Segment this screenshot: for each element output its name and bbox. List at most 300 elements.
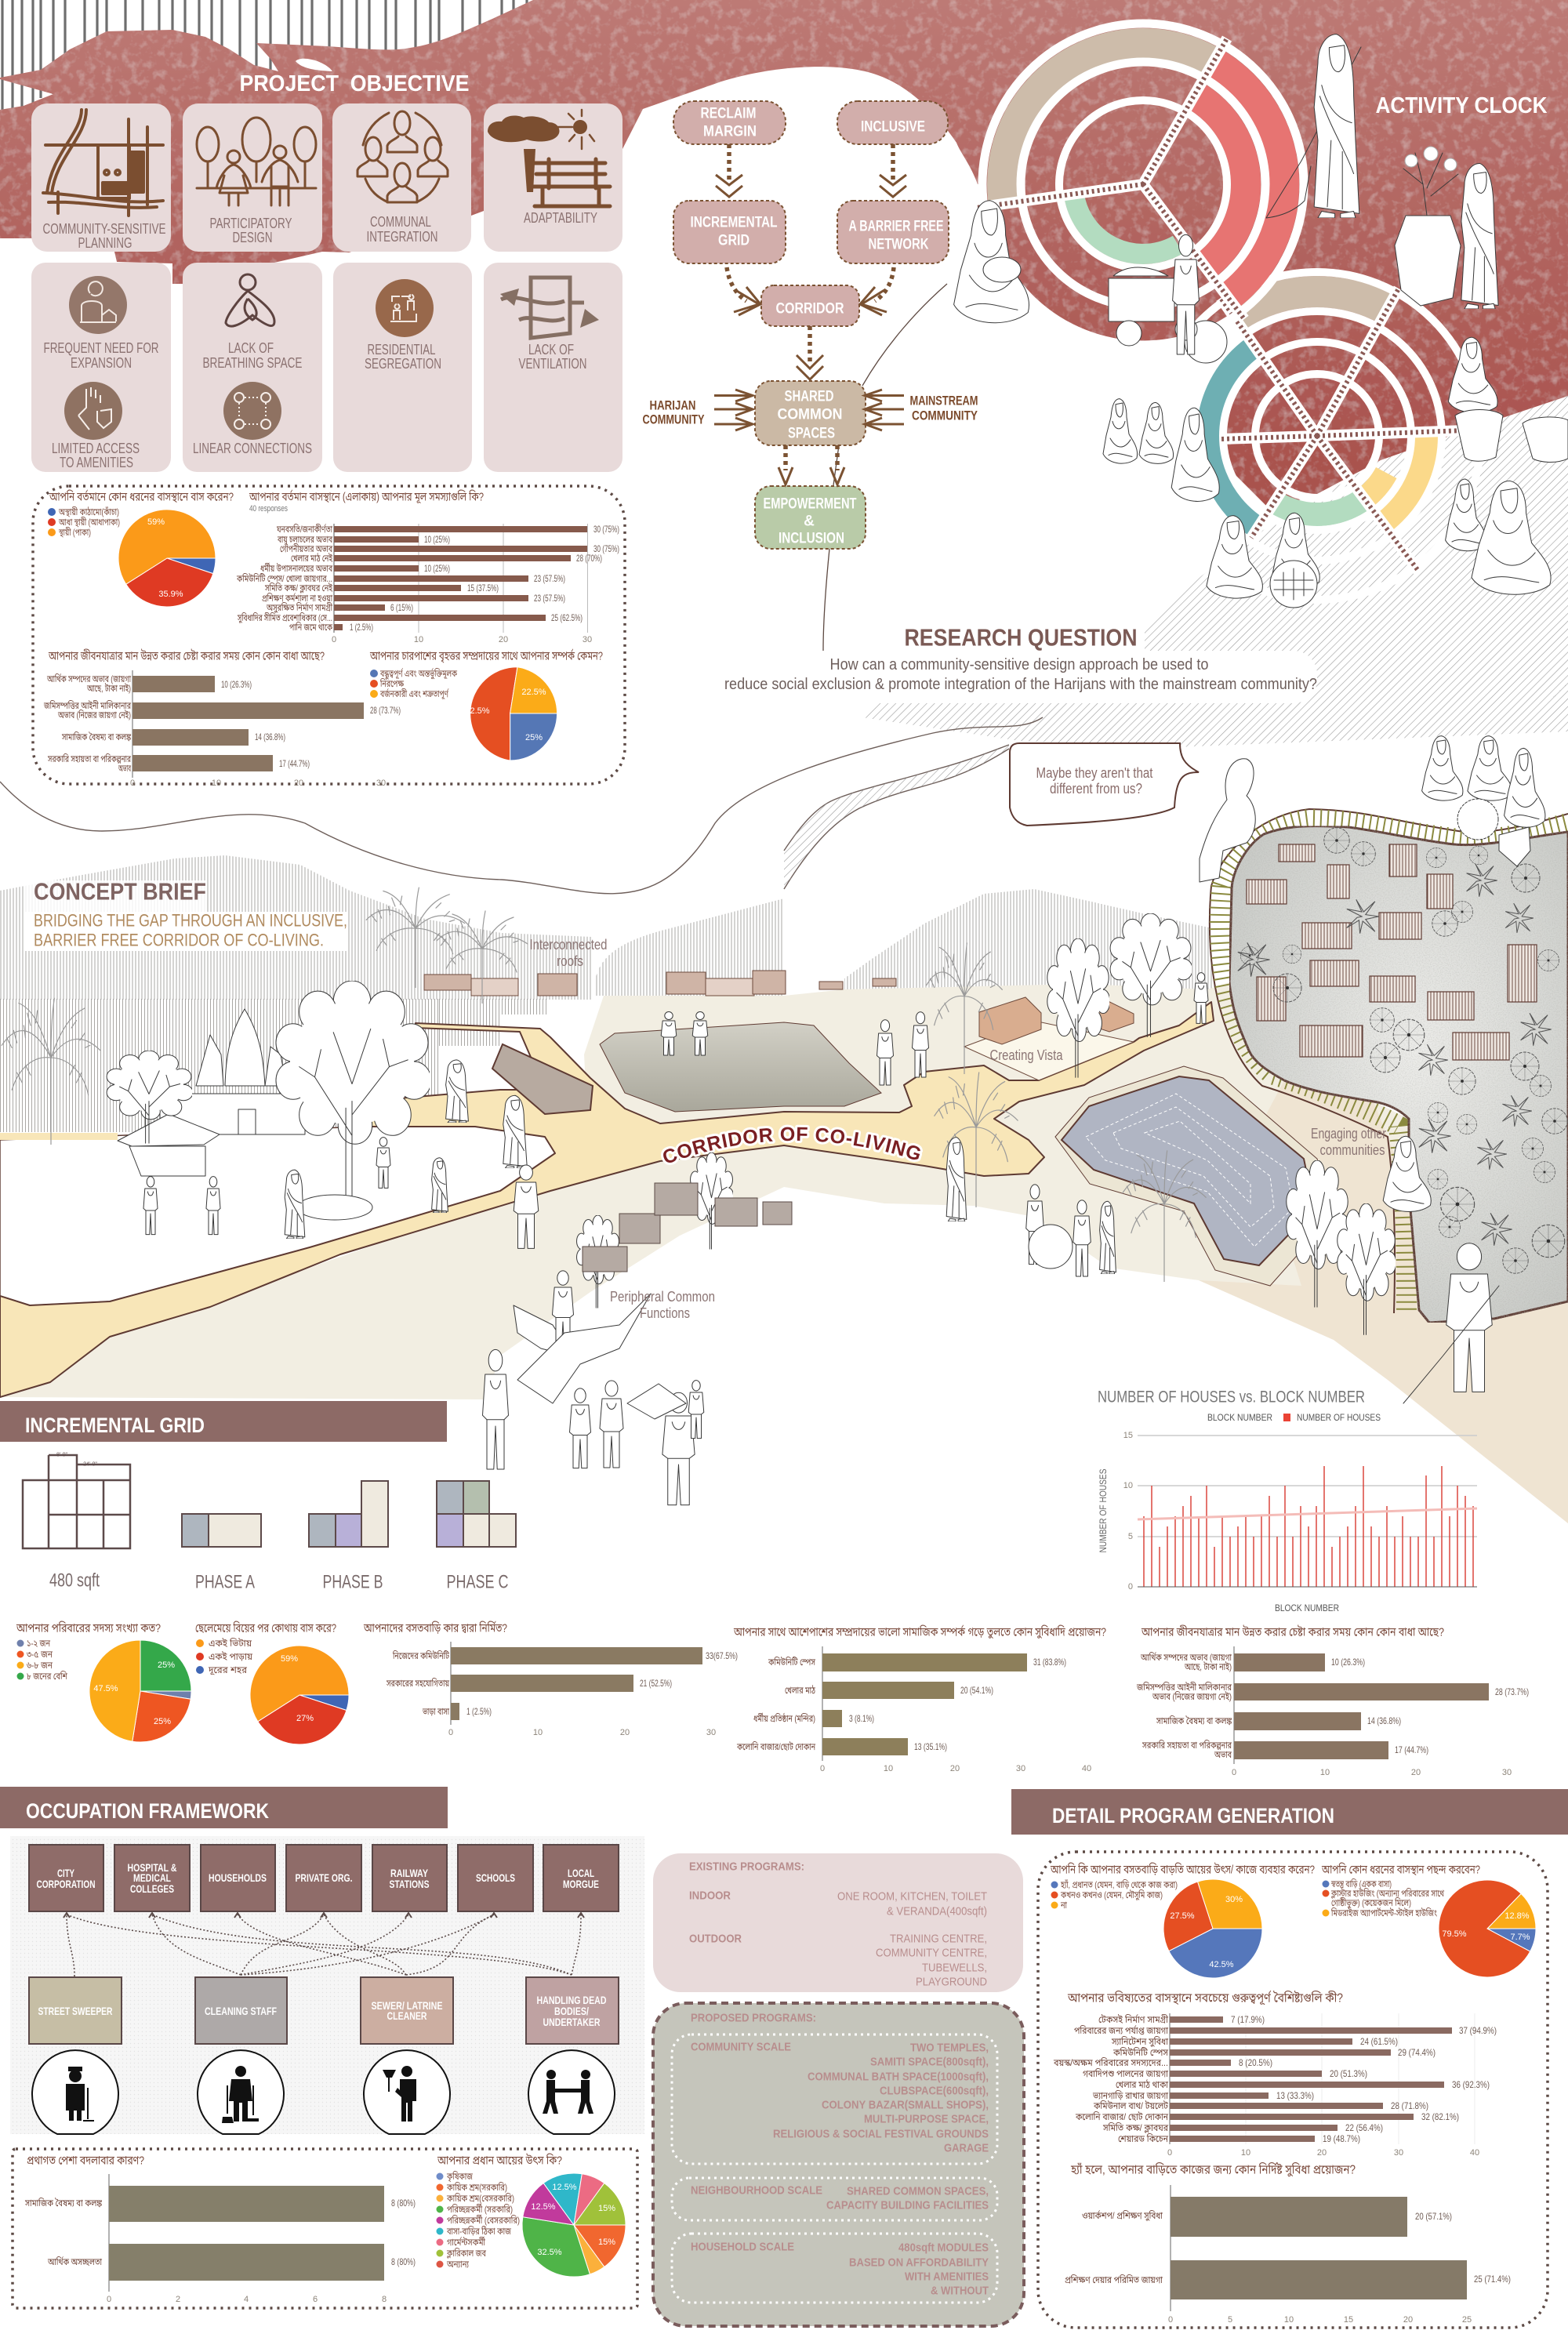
chart: facilities for relations bars: 3 (8.1%) [849, 1713, 874, 1724]
chart: future housing features bars: ভ্যানগাড়ি রাখার জায়গা [1092, 2089, 1169, 2101]
chart: work facilities bars: প্রশিক্ষণ দেয়ার পরিমিত জায়গা [1065, 2274, 1163, 2285]
title: project objective: PROJECT OBJECTIVE [240, 71, 469, 96]
figure: large sweeper bottom right [1403, 1243, 1499, 1403]
hatched ribbon [784, 745, 1009, 889]
chart: main problems bar chart: 30 (75%) [593, 543, 619, 554]
chart: housing type pie: আপনি বর্তমানে কোন ধরনের বাসস্থানে বাস করেন? [49, 489, 234, 503]
chart: household size pie: ৮ জনের বেশি [27, 1670, 68, 1682]
chart: work facilities bars: 15 [1344, 2315, 1353, 2325]
community scale: GARAGE [944, 2142, 989, 2154]
chart: reasons for changing occupation [24, 2154, 416, 2304]
chart: future housing features bars: আপনার ভবিষ্যতের বাসস্থানে সবচেয়ে গুরুত্বপূর্ণ বৈশিষ্ট্যগুলি কী? [1067, 1990, 1343, 2005]
chart: preferred housing pie: মিডরাইজ অ্যাপার্টমেন্ট-স্টাইল হাউজিং [1330, 1907, 1438, 1918]
chart: facilities for relations bars: 13 (35.1%) [914, 1741, 947, 1752]
chart: preferred housing pie: গোষ্ঠীভুক্ত) (কয়েকজন মিলে) [1331, 1896, 1411, 1909]
chart: future housing features bars: 37 (94.9%) [1459, 2025, 1497, 2036]
label: engaging other communities [1311, 1126, 1386, 1158]
icon: linear connections [223, 382, 281, 440]
plan trees [1238, 828, 1567, 1273]
chart: future housing features bars: কলোনি বাজার/ ছোট দোকান [1075, 2111, 1169, 2122]
destination labels: HOUSEHOLDS [209, 1871, 267, 1884]
chart: future housing features bars: সমিতি কক্ষ/ ক্লাবঘর [1102, 2122, 1169, 2133]
chart: barriers bar chart: 14 (36.8%) [255, 731, 285, 742]
destination labels: CORPORATION [36, 1878, 96, 1890]
panel: existing programs: EXISTING PROGRAMS: [689, 1860, 804, 1874]
chart: home as income source pie: হ্যাঁ, প্রধানত (যেমন, বাড়ি থেকে কাজ করা) [1060, 1878, 1178, 1890]
chart: work facilities bars: 10 [1284, 2315, 1294, 2325]
card labels: INTEGRATION [367, 229, 437, 245]
white band behind question [721, 651, 1317, 703]
chart: future housing features bars: টেকসই নির্মাণ সামগ্রী [1098, 2013, 1169, 2025]
chart: housing type pie: স্থায়ী (পাকা) [58, 526, 91, 538]
figure: rickshaw puller [1109, 234, 1227, 363]
chart: barriers bar chart: 10 (26.3%) [221, 679, 252, 690]
chart: future housing features bars: 7 (17.9%) [1231, 2014, 1265, 2025]
card labels: ADAPTABILITY [524, 210, 597, 226]
illustration: figures around the clock [954, 34, 1568, 608]
chart: future housing features bars: স্যানিটেশন সুবিধা [1111, 2035, 1169, 2048]
chart: household size pie: ১-২ জন [27, 1638, 51, 1649]
community scale: RELIGIOUS & SOCIAL FESTIVAL GROUNDS [773, 2128, 989, 2140]
chart: where married children live pie: একই পাড়ায় [209, 1650, 252, 1662]
neighbourhood scale: CAPACITY BUILDING FACILITIES [826, 2198, 989, 2212]
chart: facilities for relations bars: 20 [950, 1764, 960, 1773]
activity clock 2 [1153, 272, 1486, 600]
chart: housing type pie [48, 489, 234, 607]
flow chart: concept diagram [643, 101, 978, 651]
chart: barriers bar chart: 20 [294, 779, 303, 788]
chart: main problems bar chart: কমিউনিটি স্পেস/ খোলা জায়গার... [236, 572, 332, 584]
chart: future housing features bars: 8 (20.5%) [1239, 2057, 1272, 2068]
icon: participatory people and trees [197, 118, 316, 205]
figures: children flying kites [483, 1271, 704, 1505]
people along corridor [143, 973, 1208, 1276]
card labels: COMMUNITY-SENSITIVE [42, 221, 166, 237]
chart: reasons for changing occupation: 8 (80%) [391, 2256, 416, 2267]
question text [724, 656, 1317, 693]
chart: main income source pie: বাসা-বাড়ির ঠিকা কাজ [446, 2225, 511, 2237]
chart: future housing features bars: গবাদিপশু পালনের জায়গা [1083, 2067, 1169, 2079]
card labels: TO AMENITIES [60, 455, 133, 470]
chart: main income source pie: পরিচ্ছন্নকর্মী (সরকারি) [447, 2203, 513, 2215]
community scale: TWO TEMPLES, [910, 2042, 989, 2054]
occupation labels: STREET SWEEPER [38, 2005, 113, 2017]
card labels: LIMITED ACCESS [52, 441, 140, 456]
chart: future housing features bars: 0 [1167, 2148, 1172, 2158]
chart: community relationship pie: 22.5% [521, 688, 546, 697]
chart: main problems bar chart: 28 (70%) [576, 553, 602, 564]
speech bubble: different from us? [1050, 781, 1142, 797]
chart: life barriers bars: সামাজিক বৈষম্য বা কলঙ্ক [1156, 1715, 1232, 1726]
section: detail program generation [1011, 1789, 1568, 2328]
chart: number of houses vs block number: 10 [1123, 1481, 1133, 1490]
chart: main problems bar chart: 30 (75%) [593, 524, 619, 535]
chart: main problems bar chart: ধর্মীয় উপাসনালয়ের অভাব [260, 562, 333, 574]
panel: existing programs: INDOOR [689, 1889, 731, 1902]
chart: where married children live pie: 27% [296, 1714, 314, 1723]
phase c [437, 1481, 516, 1593]
chart: future housing features bars: 20 [1317, 2148, 1327, 2158]
legend: BLOCK NUMBER [1207, 1412, 1272, 1423]
vista plaza and buildings [964, 989, 1134, 1080]
contour lines [0, 717, 1043, 894]
label: mainstream community: MAINSTREAM [909, 394, 978, 408]
household scale [672, 2234, 997, 2303]
chart: facilities for relations bars: 31 (83.8%) [1033, 1657, 1066, 1668]
chart: who built the house bars: আপনাদের বসতবাড়ি কার দ্বারা নির্মিত? [363, 1621, 507, 1635]
phase b: PHASE B [323, 1571, 383, 1593]
household scale: WITH AMENITIES [905, 2270, 989, 2283]
chart: barriers bar chart: 30 [376, 779, 386, 788]
destination boxes [29, 1845, 619, 1911]
speech bubble: Maybe they aren't that [1036, 765, 1152, 781]
roof strip buildings [424, 971, 896, 996]
house roofs [1247, 844, 1537, 1060]
chart: number of houses vs block number: 15 [1123, 1431, 1133, 1440]
occupation labels: HANDLING DEAD [536, 1994, 607, 2006]
destination labels: MEDICAL [133, 1871, 171, 1884]
chart: household size pie: 47.5% [93, 1684, 118, 1693]
chart: home as income source pie: কখনও কখনও (যেমন, মৌসুমি কাজ) [1060, 1889, 1163, 1901]
flow box: reclaim margin: RECLAIM [701, 105, 756, 122]
chart: main income source pie [436, 2154, 626, 2277]
label: interconnected roofs: roofs [557, 953, 583, 969]
chart: who built the house bars: 20 [620, 1728, 630, 1737]
lower hatching of the left hill [0, 1007, 549, 1065]
chart: facilities for relations bars: ধর্মীয় প্রতিষ্ঠান (মন্দির) [753, 1711, 815, 1724]
grid diagram 480 sqft: 8'-0" [56, 1452, 67, 1458]
occupation labels: CLEANER [387, 2009, 426, 2022]
chart: main problems bar chart: 23 (57.5%) [534, 593, 565, 604]
chart: preferred housing pie: 7.7% [1510, 1933, 1530, 1942]
chart: future housing features bars: 19 (48.7%) [1323, 2133, 1360, 2144]
card labels: VENTILATION [519, 356, 586, 372]
flow box: shared common spaces [755, 381, 866, 445]
chart: community relationship pie: আপনার চারপাশের বৃহত্তর সম্প্রদায়ের সাথে আপনার সম্পর্ক কেমন? [369, 649, 603, 663]
pond [1055, 1066, 1333, 1286]
palms and trees [2, 887, 1396, 1334]
icon: body handlers [528, 2050, 615, 2134]
card labels: BREATHING SPACE [202, 355, 303, 371]
chart: number of houses vs block number: 5 [1128, 1532, 1133, 1541]
chart: barriers bar chart: অভাব [118, 763, 131, 774]
community scale: COMMUNITY SCALE [691, 2040, 791, 2054]
label: mainstream community [909, 394, 978, 423]
chart: household size pie: 25% [158, 1661, 175, 1670]
chart: life barriers bars: আপনার জীবনযাত্রার মান উন্নত করার চেষ্টা করার সময় কোন কোন বাধা আছে? [1141, 1626, 1444, 1639]
chart: future housing features bars: পরিবারের জন্য পর্যাপ্ত জায়গা [1074, 2024, 1169, 2036]
chart: barriers bar chart [43, 649, 401, 788]
chart: main problems bar chart: 23 (57.5%) [534, 573, 565, 584]
chart: facilities for relations bars: আপনার সাথে আশেপাশের সম্প্রদায়ের ভালো সামাজিক সম্পর্ক গড়ে তুলতে কোন সুবিধাদি প্রয়োজন? [733, 1624, 1106, 1639]
chart: who built the house bars: 1 (2.5%) [466, 1706, 492, 1717]
chart: preferred housing pie: 12.8% [1504, 1911, 1530, 1921]
chart: future housing features bars: 32 (82.1%) [1421, 2111, 1459, 2122]
chart: future housing features bars: শেয়ারড কিচেন [1118, 2132, 1169, 2144]
activity clock 1 [976, 24, 1304, 345]
chart: main problems bar chart: 30 [583, 635, 592, 644]
occupation labels: CLEANING STAFF [205, 2005, 277, 2017]
chart: future housing features bars: কমিউনিটি স্পেস [1112, 2046, 1168, 2058]
chart: housing type pie: 35.9% [158, 590, 183, 599]
chart: where married children live pie: দূরের শহর [208, 1664, 248, 1675]
legend: NUMBER OF HOUSES [1297, 1412, 1381, 1423]
chart: main problems bar chart: গোপনীয়তার অভাব [280, 543, 333, 554]
flow box: shared common spaces: COMMON [778, 406, 842, 423]
card labels: PLANNING [78, 235, 132, 251]
speech bubble [1010, 743, 1199, 826]
chart: community relationship pie: বর্জনকারী এবং শত্রুতাপূর্ণ [379, 688, 449, 700]
card labels: SEGREGATION [365, 356, 441, 372]
panel: occupation survey [13, 2149, 637, 2308]
flow box: inclusive [837, 101, 948, 144]
chart: life barriers bars: অভাব [1214, 1749, 1232, 1760]
chart: household size pie: 25% [154, 1717, 171, 1726]
section: occupation framework [0, 1787, 644, 2308]
chart: community relationship pie: বন্ধুত্বপূর্ণ এবং অন্তর্ভুক্তিমূলক [379, 667, 457, 681]
chart: life barriers bars: 17 (44.7%) [1395, 1744, 1428, 1755]
neighbourhood scale: NEIGHBOURHOOD SCALE [691, 2184, 822, 2197]
chart: main income source pie: কায়িক শ্রম(বেসরকারি) [446, 2192, 514, 2204]
chart: main problems bar chart: 1 (2.5%) [350, 622, 373, 633]
taupe building [492, 1044, 593, 1114]
banner [0, 1787, 448, 1828]
card labels: LACK OF [228, 340, 274, 356]
household scale: HOUSEHOLD SCALE [691, 2241, 794, 2253]
chart: home as income source pie: 27.5% [1170, 1911, 1195, 1921]
research question [721, 623, 1317, 703]
panel: existing programs: & VERANDA(400sqft) [887, 1905, 987, 1918]
chart: future housing features bars: 29 (74.4%) [1398, 2047, 1436, 2058]
chart: community relationship pie [369, 649, 603, 760]
chart: main income source pie: কৃষিকাজ [446, 2170, 473, 2183]
chart: facilities for relations bars: কলোনি বাজার/ছোট দোকান [736, 1740, 816, 1752]
chart: who built the house bars [363, 1621, 738, 1737]
chart: work facilities bars: 0 [1168, 2315, 1173, 2325]
chart: preferred housing pie: স্বতন্ত্র বাড়ি (একক বাসা) [1330, 1878, 1392, 1889]
label: interconnected roofs [530, 937, 607, 969]
chart: future housing features bars: 13 (33.3%) [1276, 2090, 1314, 2101]
chart title: NUMBER OF HOUSES vs. BLOCK NUMBER [1098, 1388, 1365, 1406]
chart: preferred housing pie: আপনি কোন ধরনের বাসস্থান পছন্দ করবেন? [1321, 1863, 1480, 1877]
chart: barriers bar chart: 0 [130, 779, 135, 788]
occupation labels: SEWER/ LATRINE [372, 1999, 442, 2012]
chart: future housing features bars: 30 [1394, 2148, 1403, 2158]
chart: life barriers bars: 10 (26.3%) [1331, 1657, 1365, 1668]
community scale: SAMITI SPACE(800sqft), [870, 2056, 989, 2068]
gray mound [600, 1022, 881, 1112]
chart: work facilities bars: 20 [1403, 2315, 1413, 2325]
chart: household size pie: ৩-৫ জন [27, 1649, 53, 1660]
flow box: shared common spaces: SPACES [788, 425, 835, 442]
chart: home as income source pie [1050, 1863, 1315, 1978]
chart: life barriers bars: সরকারি সহায়তা বা পরিকল্পনার [1142, 1739, 1232, 1751]
flow box: incremental grid [673, 201, 786, 263]
big banyan tree [276, 981, 431, 1220]
destination labels: LOCAL [568, 1867, 594, 1879]
yellow corridor path [0, 1002, 1214, 1397]
chart: facilities for relations bars: 30 [1016, 1764, 1025, 1773]
red watercolor backdrop [0, 0, 1568, 510]
background hatch: upper right ground [862, 396, 1568, 747]
kiosk [118, 1114, 220, 1176]
central white plaza [0, 1127, 555, 1305]
phase a [182, 1514, 261, 1593]
chart: main problems bar chart: 10 (25%) [424, 563, 450, 574]
label: mainstream community: COMMUNITY [912, 408, 978, 423]
chart: number of houses vs block number: BLOCK NUMBER [1275, 1602, 1339, 1613]
chart: main problems bar chart [236, 489, 619, 644]
concept brief [25, 878, 348, 951]
chart: work facilities bars [1065, 2162, 1511, 2325]
chart: barriers bar chart: আপনার জীবনযাত্রার মান উন্নত করার চেষ্টা করার সময় কোন কোন বাধা আছে? [48, 649, 325, 663]
flow box: empowerment and inclusion: & [804, 513, 815, 530]
chart: who built the house bars: 30 [706, 1728, 716, 1737]
chart: barriers bar chart: জমিসম্পত্তির আইনী মালিকানার [43, 699, 132, 711]
card labels: LACK OF [528, 342, 574, 358]
destination labels: SCHOOLS [476, 1871, 515, 1884]
icon: sewer cleaner [364, 2050, 450, 2134]
flow box: incremental grid: INCREMENTAL [690, 215, 778, 230]
flow box: corridor [761, 285, 859, 326]
label: peripheral common functions: Peripheral Common [610, 1289, 715, 1305]
card labels: PARTICIPATORY [210, 216, 292, 231]
heading: CONCEPT BRIEF [34, 878, 206, 905]
concept text: BARRIER FREE CORRIDOR OF CO-LIVING. [34, 930, 324, 950]
chart: who built the house bars: নিজেদের কমিউনিটি [392, 1650, 449, 1661]
left yellow strip [0, 1133, 118, 1140]
chart: work facilities bars: 25 [1462, 2315, 1472, 2325]
flow box: empowerment and inclusion [755, 486, 866, 549]
chart: work facilities bars: 20 (57.1%) [1415, 2211, 1452, 2222]
figure: washing woman with buckets [1448, 337, 1568, 463]
concept text: BRIDGING THE GAP THROUGH AN INCLUSIVE, [34, 911, 347, 930]
chart: who built the house bars: 0 [448, 1728, 453, 1737]
chart: main problems bar chart: খেলার মাঠ নেই [291, 552, 332, 564]
occupation labels: BODIES/ [554, 2005, 589, 2017]
figure: planter and woman [1395, 147, 1498, 309]
flow box: incremental grid: GRID [718, 232, 750, 249]
figure: crouching worker [1383, 1136, 1431, 1212]
chart: main problems bar chart: 10 [414, 635, 423, 644]
icon: communal integration circle [358, 111, 448, 202]
chart: main income source pie: ক্লারিকাল জব [446, 2247, 487, 2259]
chart: facilities for relations bars: কমিউনিটি স্পেস [768, 1656, 815, 1668]
figure: villagers on wall [1422, 736, 1545, 866]
chart: home as income source pie: 42.5% [1209, 1960, 1234, 1969]
chart: future housing features bars: কমিউনাল বাথ/ টয়লেট [1093, 2100, 1168, 2111]
temple [160, 1009, 305, 1134]
question text: How can a community-sensitive design approach be used to [829, 656, 1209, 673]
chart: future housing features bars: 28 (71.8%) [1391, 2100, 1428, 2111]
neighbourhood scale [672, 2178, 997, 2220]
chart: main problems bar chart: 25 (62.5%) [551, 612, 583, 623]
title: activity clock: ACTIVITY CLOCK [1375, 93, 1548, 118]
community scale: COLONY BAZAR(SMALL SHOPS), [822, 2098, 989, 2112]
panel: existing programs: COMMUNITY CENTRE, [876, 1946, 987, 1960]
chart: home as income source pie: 30% [1225, 1895, 1243, 1904]
card labels: COMMUNAL [370, 214, 431, 230]
destination labels: MORGUE [563, 1878, 599, 1890]
grid diagram 480 sqft: 24'-0" [83, 1461, 97, 1468]
dotted frame [1038, 1852, 1548, 2328]
banner: OCCUPATION FRAMEWORK [26, 1799, 269, 1823]
panel: existing programs: PLAYGROUND [916, 1976, 987, 1988]
icon: cleaning staff [198, 2050, 284, 2134]
community scale: COMMUNAL BATH SPACE(1000sqft), [808, 2070, 989, 2084]
label: peripheral common functions: Functions [640, 1305, 690, 1321]
chart: facilities for relations bars: 20 (54.1%) [960, 1685, 993, 1696]
chart: facilities for relations bars: 40 [1082, 1764, 1091, 1773]
community block plan [1210, 809, 1568, 1323]
chart: reasons for changing occupation: আর্থিক অসচ্ছলতা [47, 2256, 103, 2267]
destination labels: RAILWAY [390, 1867, 429, 1879]
figure: girl sitting on wall [1200, 759, 1255, 882]
chart: barriers bar chart: সামাজিক বৈষম্য বা কলঙ্ক [61, 731, 132, 742]
flow box: empowerment and inclusion: INCLUSION [779, 530, 844, 547]
chart: where married children live pie: 59% [281, 1654, 298, 1664]
chart: facilities for relations bars: খেলার মাঠ [785, 1684, 815, 1696]
chart: work facilities bars: হ্যাঁ হলে, আপনার বাড়িতে কাজের জন্য কোন নির্দিষ্ট সুবিধা প্রয়োজন? [1070, 2162, 1356, 2176]
label: engaging other communities: communities [1320, 1142, 1385, 1158]
concept text [34, 911, 347, 950]
chart: future housing features bars [1053, 1990, 1497, 2158]
chart: main income source pie: 15% [598, 2238, 615, 2247]
chart: main problems bar chart: 0 [332, 635, 336, 644]
chart: where married children live pie: একই ভিটায় [209, 1637, 252, 1649]
banner [0, 1401, 447, 1442]
chart: barriers bar chart: সরকারি সহায়তা বা পরিকল্পনার [47, 753, 132, 764]
chart: main income source pie: অন্যান্য [446, 2259, 470, 2270]
question text: reduce social exclusion & promote integration of the Harijans with the mainstream community? [724, 676, 1317, 693]
chart: facilities for relations bars: 0 [820, 1764, 825, 1773]
icon: frequent need for expansion [69, 276, 127, 334]
flow box: corridor: CORRIDOR [776, 301, 844, 317]
chart: preferred housing pie: 79.5% [1442, 1929, 1467, 1939]
chart: life barriers bars: 30 [1502, 1768, 1512, 1777]
chart: life barriers bars: 0 [1232, 1768, 1236, 1777]
chart: barriers bar chart: আর্থিক সম্পদের অভাব (জায়গা [46, 673, 132, 684]
chart: where married children live pie: ছেলেমেয়ে বিয়ের পর কোথায় বাস করে? [195, 1621, 336, 1635]
chart: preferred housing pie: ক্লাস্টার হাউজিং (অন্যান্য পরিবারের সাথে [1330, 1887, 1444, 1899]
figure: spinning woman [954, 201, 1029, 323]
chart: future housing features bars: বয়স্ক/অক্ষম পরিবারের সদস্যদের... [1053, 2056, 1168, 2068]
ground plane [0, 982, 1568, 1523]
icon: street sweeper [32, 2050, 118, 2134]
chart: main income source pie: পরিচ্ছন্নকর্মী (বেসরকারি) [447, 2214, 520, 2226]
chart: main problems bar chart: 40 responses [249, 504, 288, 514]
chart: barriers bar chart: 10 [212, 779, 221, 788]
landscape: concept illustration [0, 717, 1568, 1523]
chart: work facilities bars: 25 (71.4%) [1474, 2274, 1511, 2285]
chart: main problems bar chart: আপনার বর্তমান বাসস্থানে (এলাকায়) আপনার মূল সমস্যাগুলি কি? [249, 489, 484, 503]
flow box: barrier free network [837, 201, 949, 263]
banner [1011, 1789, 1568, 1835]
chart: main problems bar chart: সুবিধাদির সীমিত প্রবেশাধিকার (সে... [237, 612, 332, 624]
flow arrows [714, 144, 906, 485]
panel: existing programs: TRAINING CENTRE, [890, 1932, 987, 1946]
icon: community planning map [43, 110, 163, 216]
panel: proposed programs [653, 2003, 1024, 2326]
destination labels: STATIONS [389, 1878, 430, 1890]
icon: lack of ventilation [500, 278, 599, 338]
chart: future housing features bars: 24 (61.5%) [1360, 2036, 1398, 2047]
legend [1207, 1412, 1381, 1423]
label: creating vista: Creating Vista [989, 1047, 1063, 1063]
chart: who built the house bars: ভাড়া বাসা [422, 1706, 450, 1717]
panel: proposed programs: PROPOSED PROGRAMS: [691, 2012, 816, 2024]
chart: life barriers bars: আর্থিক সম্পদের অভাব (জায়গা [1140, 1651, 1232, 1663]
